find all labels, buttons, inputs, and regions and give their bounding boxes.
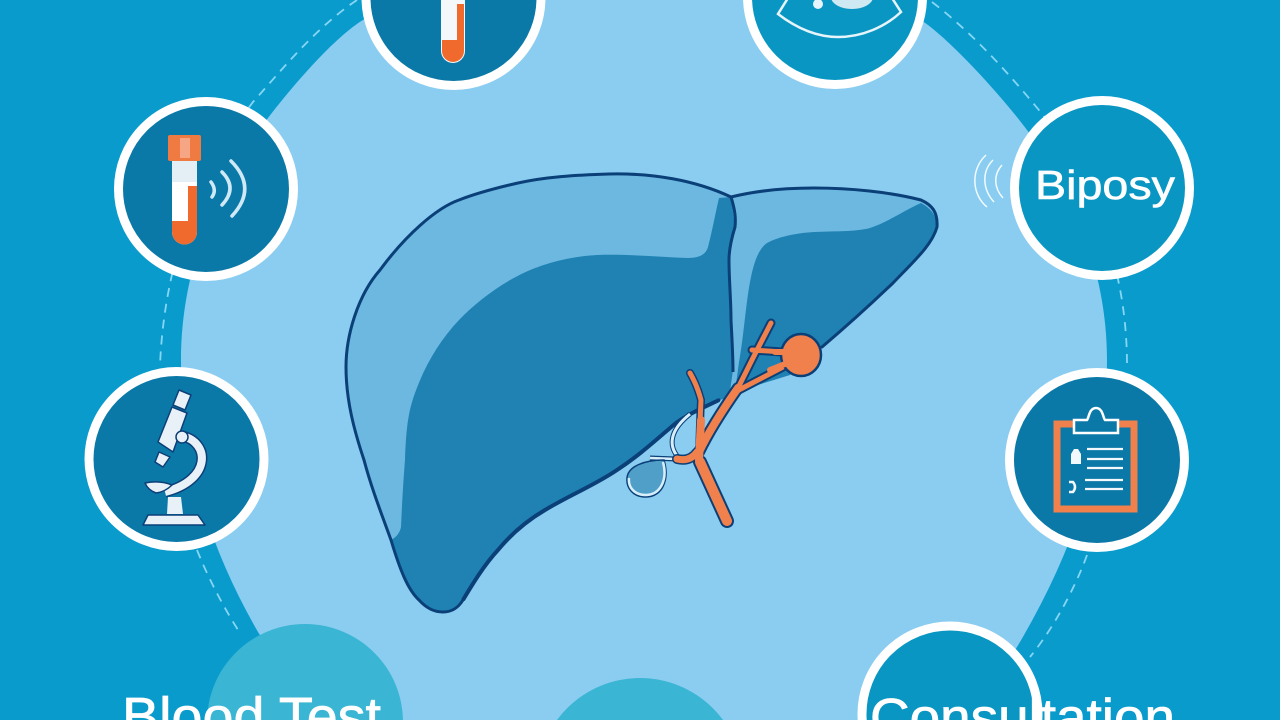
liver outline xyxy=(346,174,937,612)
step: tube with signal waves xyxy=(118,102,294,276)
step: centre teal circle xyxy=(537,678,743,720)
step: ultrasound xyxy=(748,0,922,84)
icon: signal arcs xyxy=(975,155,1003,207)
step: clipboard xyxy=(1010,372,1184,548)
lobe fissure xyxy=(729,197,735,372)
left lobe shading xyxy=(391,197,735,612)
lower liver edge xyxy=(463,400,719,600)
right lobe shading xyxy=(735,203,937,392)
icon: signal waves xyxy=(211,161,245,216)
bile ducts xyxy=(677,323,821,521)
step: blood sample tube top xyxy=(366,0,541,86)
liver base shape xyxy=(346,174,937,612)
liver illustration xyxy=(346,174,937,612)
icon: microscope xyxy=(143,390,205,525)
icon: test tube xyxy=(441,0,465,63)
icon: clipboard xyxy=(1057,408,1134,509)
icon: ultrasound fan xyxy=(778,0,901,37)
step: biopsy xyxy=(975,100,1190,276)
icon: test tube xyxy=(168,135,201,244)
step: blood test xyxy=(122,624,403,720)
gallbladder xyxy=(627,414,690,497)
central light circle xyxy=(181,0,1107,720)
step: consultation xyxy=(862,626,1175,720)
step: microscope xyxy=(89,372,264,546)
biopsy label: Biposy xyxy=(1035,162,1176,208)
